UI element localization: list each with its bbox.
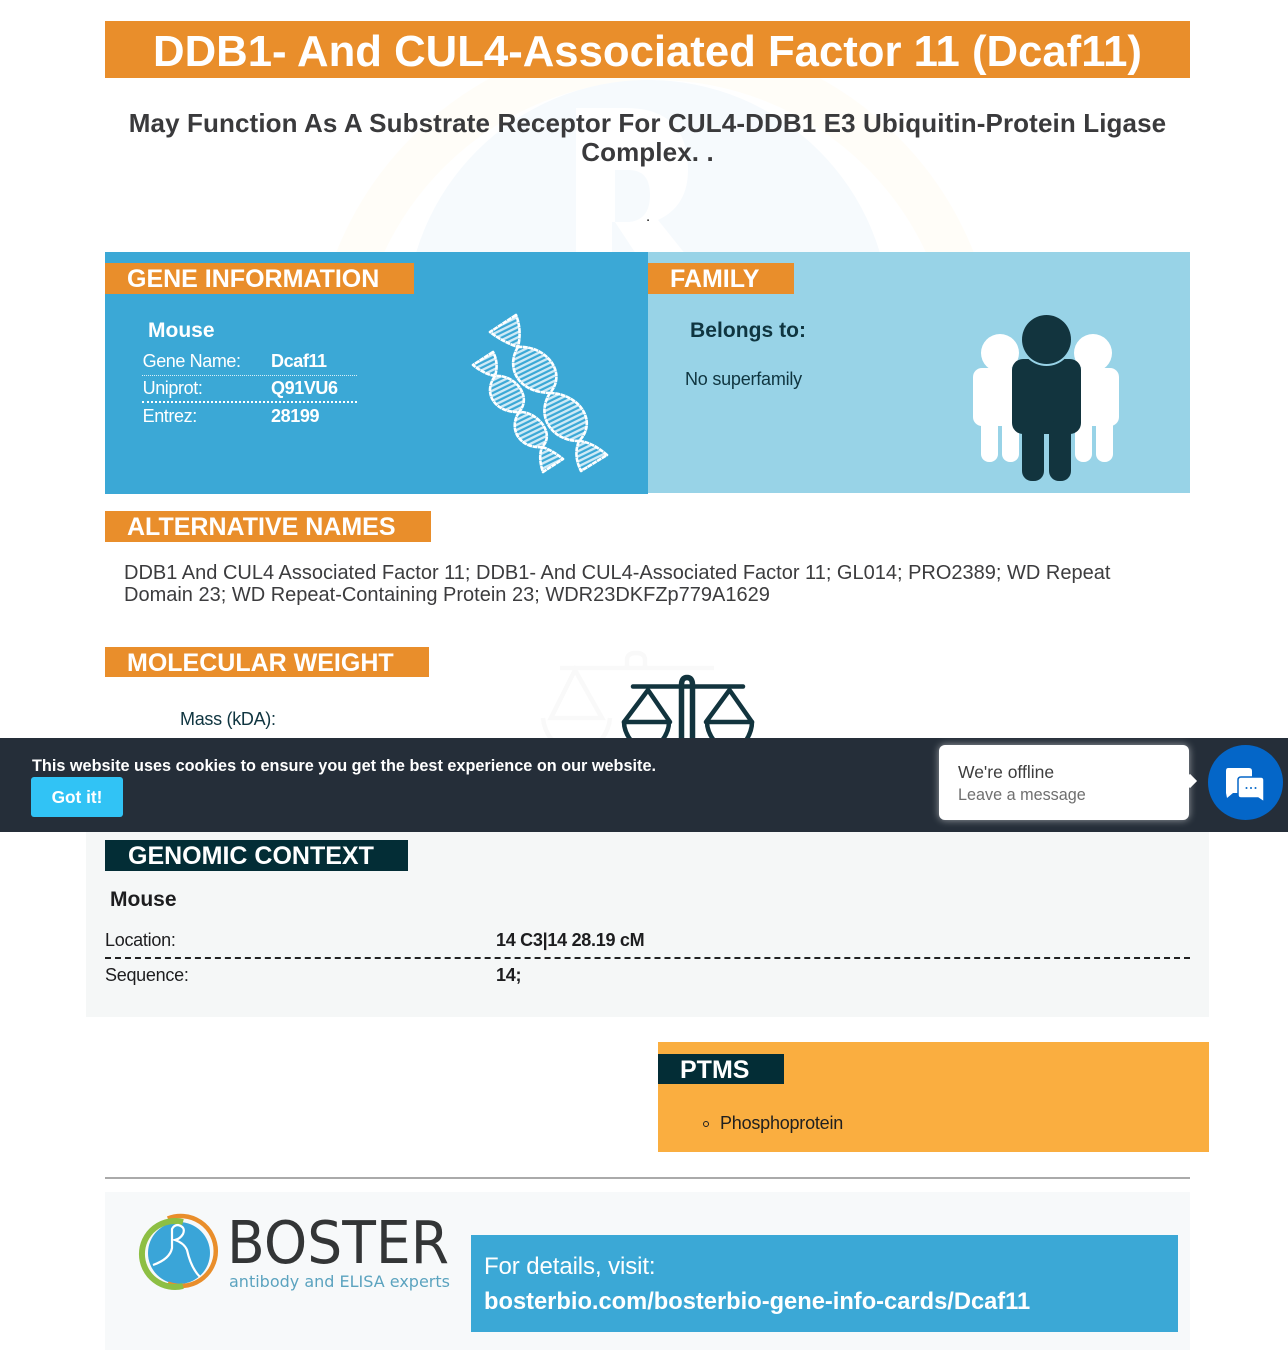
offline text: We're offline — [958, 762, 1054, 782]
gene name row: Gene Name: — [143, 351, 241, 371]
panel: PTMs — [658, 1042, 1209, 1152]
bullet marker — [703, 1121, 709, 1127]
location row: Location: — [105, 930, 176, 950]
alternative names text: Domain 23; WD Repeat-Containing Protein 23; WDR23DKFZp779A1629 — [124, 584, 770, 606]
logo: Boster: BOSTER — [227, 1208, 449, 1277]
heading: family — [648, 263, 794, 294]
heading: alternative names: ALTERNATIVE NAMES — [127, 513, 396, 541]
chat message bubble — [939, 745, 1189, 820]
heading: genomic context: GENOMIC CONTEXT — [128, 842, 374, 870]
uniprot row: Uniprot: — [143, 378, 202, 398]
subtitle: May Function As A Substrate Receptor For CUL4-DDB1 E3 Ubiquitin-Protein Ligase — [129, 108, 1166, 138]
heading: molecular weight: MOLECULAR WEIGHT — [127, 649, 394, 677]
sequence row — [105, 965, 521, 985]
panel: gene information — [105, 252, 648, 494]
watermark logo — [416, 80, 880, 252]
belongs to label: Belongs to: — [690, 319, 806, 342]
small dot: . — [646, 208, 650, 225]
heading: family: FAMILY — [670, 265, 759, 293]
location row — [105, 928, 1190, 959]
alternative names text — [124, 562, 1110, 606]
mass label: Mass (kDA): — [180, 709, 276, 729]
icon: chat button — [1208, 745, 1283, 820]
sequence row: 14; — [496, 965, 521, 985]
entrez row: Entrez: — [143, 406, 197, 426]
entrez row — [143, 406, 319, 426]
panel: family — [648, 252, 1190, 493]
PTM item: Phosphoprotein — [720, 1113, 843, 1133]
uniprot row: Q91VU6 — [271, 378, 338, 398]
gene name row — [142, 349, 357, 376]
logo: Boster: antibody and ELISA experts — [229, 1272, 450, 1291]
location row: 14 C3|14 28.19 cM — [496, 930, 644, 950]
subtitle: Complex. . — [581, 137, 714, 167]
subtitle — [129, 108, 1166, 167]
heading: gene information: GENE INFORMATION — [127, 265, 379, 293]
bubble pointer — [1183, 774, 1197, 788]
superfamily text: No superfamily — [685, 369, 802, 389]
uniprot row — [142, 376, 357, 403]
panel: footer — [105, 1192, 1190, 1350]
species label: Mouse — [110, 888, 177, 911]
got it button — [31, 777, 123, 817]
visit label: For details, visit: — [484, 1253, 655, 1280]
alternative names text: DDB1 And CUL4 Associated Factor 11; DDB1- And CUL4-Associated Factor 11; GL014; PRO2389; WD Repeat — [124, 562, 1110, 584]
leave message text: Leave a message — [958, 786, 1086, 804]
call to action box — [471, 1235, 1178, 1332]
logo: Boster — [138, 1208, 450, 1291]
visit url: bosterbio.com/bosterbio-gene-info-cards/Dcaf11 — [484, 1289, 1030, 1315]
icon: people group — [973, 315, 1119, 481]
icon: balance scale — [622, 674, 754, 738]
sequence row: Sequence: — [105, 965, 189, 985]
got it button: Got it! — [52, 787, 102, 807]
heading: PTMs: PTMS — [680, 1056, 749, 1084]
cookie banner — [0, 738, 1288, 832]
icon: DNA helices — [472, 314, 608, 474]
species label: Mouse — [148, 319, 215, 342]
entrez row: 28199 — [271, 406, 319, 426]
gene name row: Dcaf11 — [271, 351, 327, 371]
heading: PTMs — [658, 1054, 784, 1084]
cookie message: This website uses cookies to ensure you get the best experience on our website. — [32, 757, 656, 775]
panel: genomic context — [86, 832, 1209, 1017]
title banner: DDB1- And CUL4-Associated Factor 11 (Dcaf11) — [153, 27, 1142, 76]
